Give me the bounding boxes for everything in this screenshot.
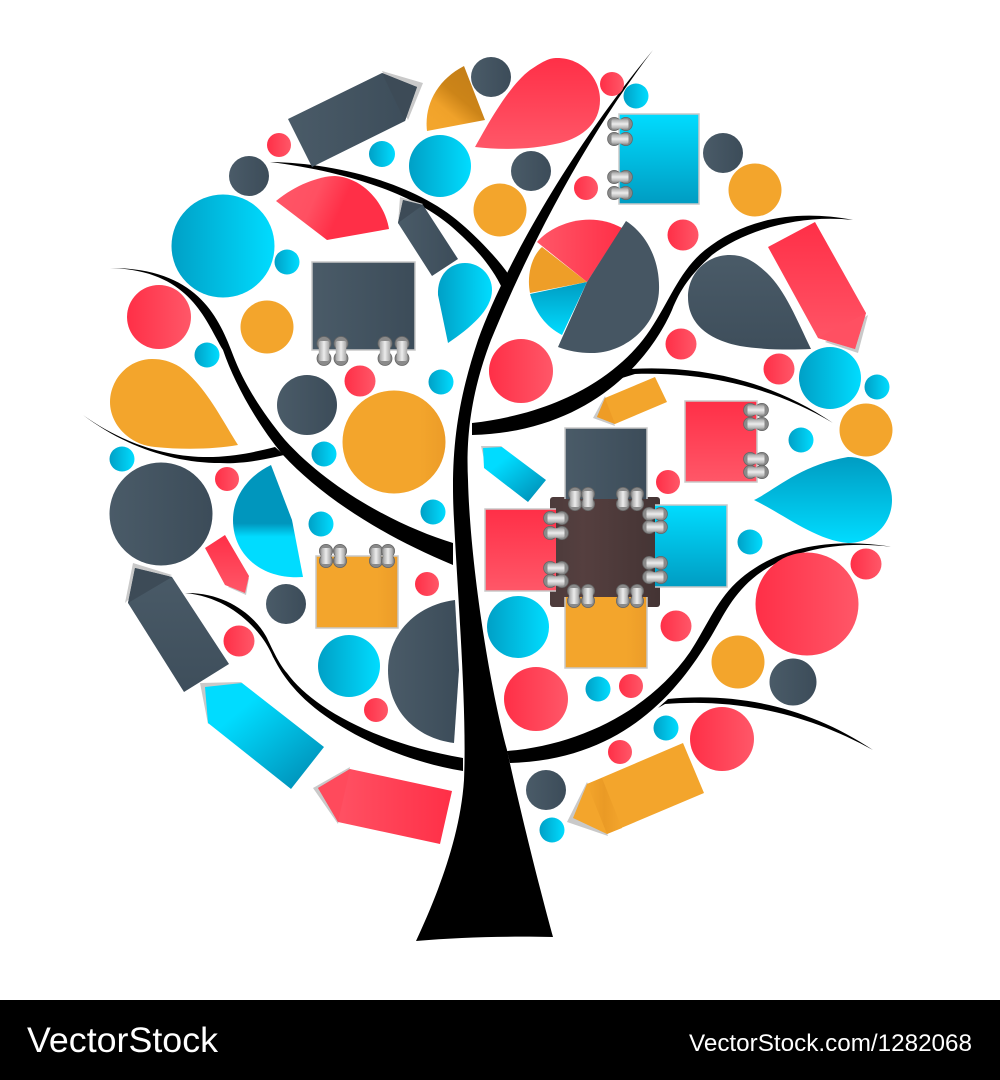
board: brown centre [550,497,660,607]
dot [369,141,395,167]
fan: orange [427,66,485,131]
tag: orange bottom [567,743,704,836]
note: blue top with rings [608,114,699,204]
dot [624,84,648,108]
footer url text: VectorStock.com/1282068 [689,1030,972,1057]
dot [110,446,134,472]
tag: navy top left [288,71,423,167]
dot [471,57,511,97]
pie chart [529,220,659,353]
pie slice: navy [558,221,659,353]
dot [770,658,816,706]
dot [266,584,306,624]
dot [312,442,336,466]
dot [110,462,212,566]
dot [127,285,191,349]
dot [864,374,890,400]
twig: lower right [658,697,873,750]
pie slice: orange [529,247,587,293]
dot [799,347,861,409]
dot [229,156,269,196]
branch: upper right [472,216,853,435]
dot [788,428,814,452]
fan: red [276,176,389,240]
tag: red bottom [313,767,452,844]
dot [504,667,568,731]
note: orange with rings [316,544,398,628]
dot [703,133,743,173]
dot [224,626,254,656]
branch: middle left [110,268,453,565]
dot [409,135,471,197]
drop: blue small [438,263,492,343]
dot [600,72,624,96]
dot [668,220,698,250]
tag: blue bottom left [200,682,324,789]
dot [586,676,610,702]
twig: middle right [622,368,833,423]
tag: navy left [125,563,229,692]
notebook cluster [485,428,727,668]
tree [83,50,893,941]
note: orange [565,597,647,668]
tag: red small left [205,535,249,595]
dot [489,339,553,403]
dot [511,151,551,191]
dot [364,698,388,722]
tag: orange small [593,377,667,426]
dot [318,635,380,697]
dot [654,716,678,740]
dot [608,740,632,764]
footer bar [0,1000,1000,1080]
note: red right with rings [685,401,768,482]
dot [215,467,239,491]
drop: red top [475,58,600,149]
rings: right [643,507,667,584]
drop: orange left [110,359,238,449]
dot [666,328,696,360]
dot [274,250,300,274]
dot [308,512,334,536]
note: navy [565,428,647,499]
note: navy with rings [312,262,415,366]
dot [487,596,549,658]
dot [840,404,892,456]
dot [342,390,446,494]
footer logo text: VectorStock [27,1020,218,1060]
half disc: blue [233,465,303,577]
dot [574,176,598,200]
drop: blue right [754,457,892,543]
branch: upper left [270,162,509,290]
twig: middle left [83,415,284,463]
dot [172,194,274,298]
branch: lower left [185,593,463,771]
dot [660,610,692,642]
dot [764,354,794,384]
dot [277,375,337,435]
dot [728,164,782,216]
dot [712,636,764,688]
drop: navy right [688,255,811,350]
note: red [485,509,556,591]
pie slice: red [537,220,622,282]
dot [526,770,566,810]
dot [194,342,220,368]
tag: red right [768,222,868,353]
dot [619,674,643,698]
dot [756,552,858,656]
dot [240,300,294,354]
tag: blue small [481,446,546,502]
tree trunk and crown stem [416,50,653,941]
dot [428,370,454,394]
dot [267,133,291,157]
dot [540,818,564,842]
dot [420,500,446,524]
branch: lower right [507,543,893,763]
dot [690,707,754,771]
dot [415,572,439,596]
dot [344,366,376,396]
pie slice: blue [530,282,587,335]
half disc: navy [388,600,459,743]
dot [474,184,526,236]
rings: left [544,511,568,588]
note: blue [655,505,727,587]
dot [850,548,882,580]
dot [738,530,762,554]
rings: bottom [567,584,644,608]
dot [656,470,680,494]
rings: top [568,487,644,511]
circle dots [110,57,892,842]
tag: navy small [398,197,458,276]
